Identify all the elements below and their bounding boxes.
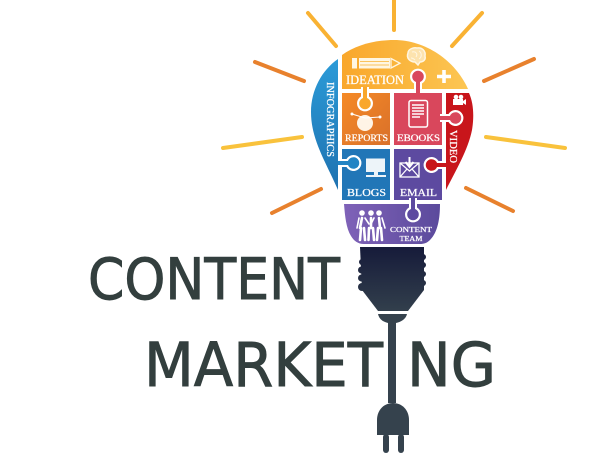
panel: ebooks <box>394 93 442 145</box>
icon: envelope <box>400 157 419 177</box>
icon: pencil <box>352 58 400 68</box>
icon: tablet <box>409 100 428 127</box>
icon: pie chart <box>350 112 382 131</box>
heading: ideation: IDEATION <box>346 72 405 87</box>
panel: blogs <box>342 149 390 200</box>
panel: video <box>446 93 473 190</box>
bulb base <box>358 247 426 311</box>
label: content team: CONTENT <box>390 225 432 234</box>
panel: reports <box>342 93 390 145</box>
panel: infographics: INFOGRAPHICS <box>324 82 335 157</box>
label: video: VIDEO <box>447 130 458 163</box>
label: reports: REPORTS <box>345 134 388 144</box>
panel: ideation <box>342 40 468 89</box>
title: marketing: MARKET <box>144 330 384 401</box>
label: blogs: BLOGS <box>347 188 386 199</box>
icon: team <box>357 210 385 240</box>
title: content: CONTENT <box>88 247 340 313</box>
panel: content team <box>344 204 440 244</box>
label: ebooks: EBOOKS <box>397 134 440 144</box>
icon: camera <box>453 95 466 105</box>
panel: content team: TEAM <box>400 234 423 243</box>
icon: plus <box>437 70 451 83</box>
panel: infographics <box>311 59 338 190</box>
cord and plug <box>377 314 409 453</box>
label: email: EMAIL <box>400 188 437 199</box>
title: marketing: NG <box>407 330 496 401</box>
icon: brain <box>407 48 425 65</box>
rays <box>223 0 565 213</box>
icon: monitor <box>366 158 386 177</box>
panel: email <box>394 149 442 200</box>
puzzle connectors <box>338 69 463 222</box>
